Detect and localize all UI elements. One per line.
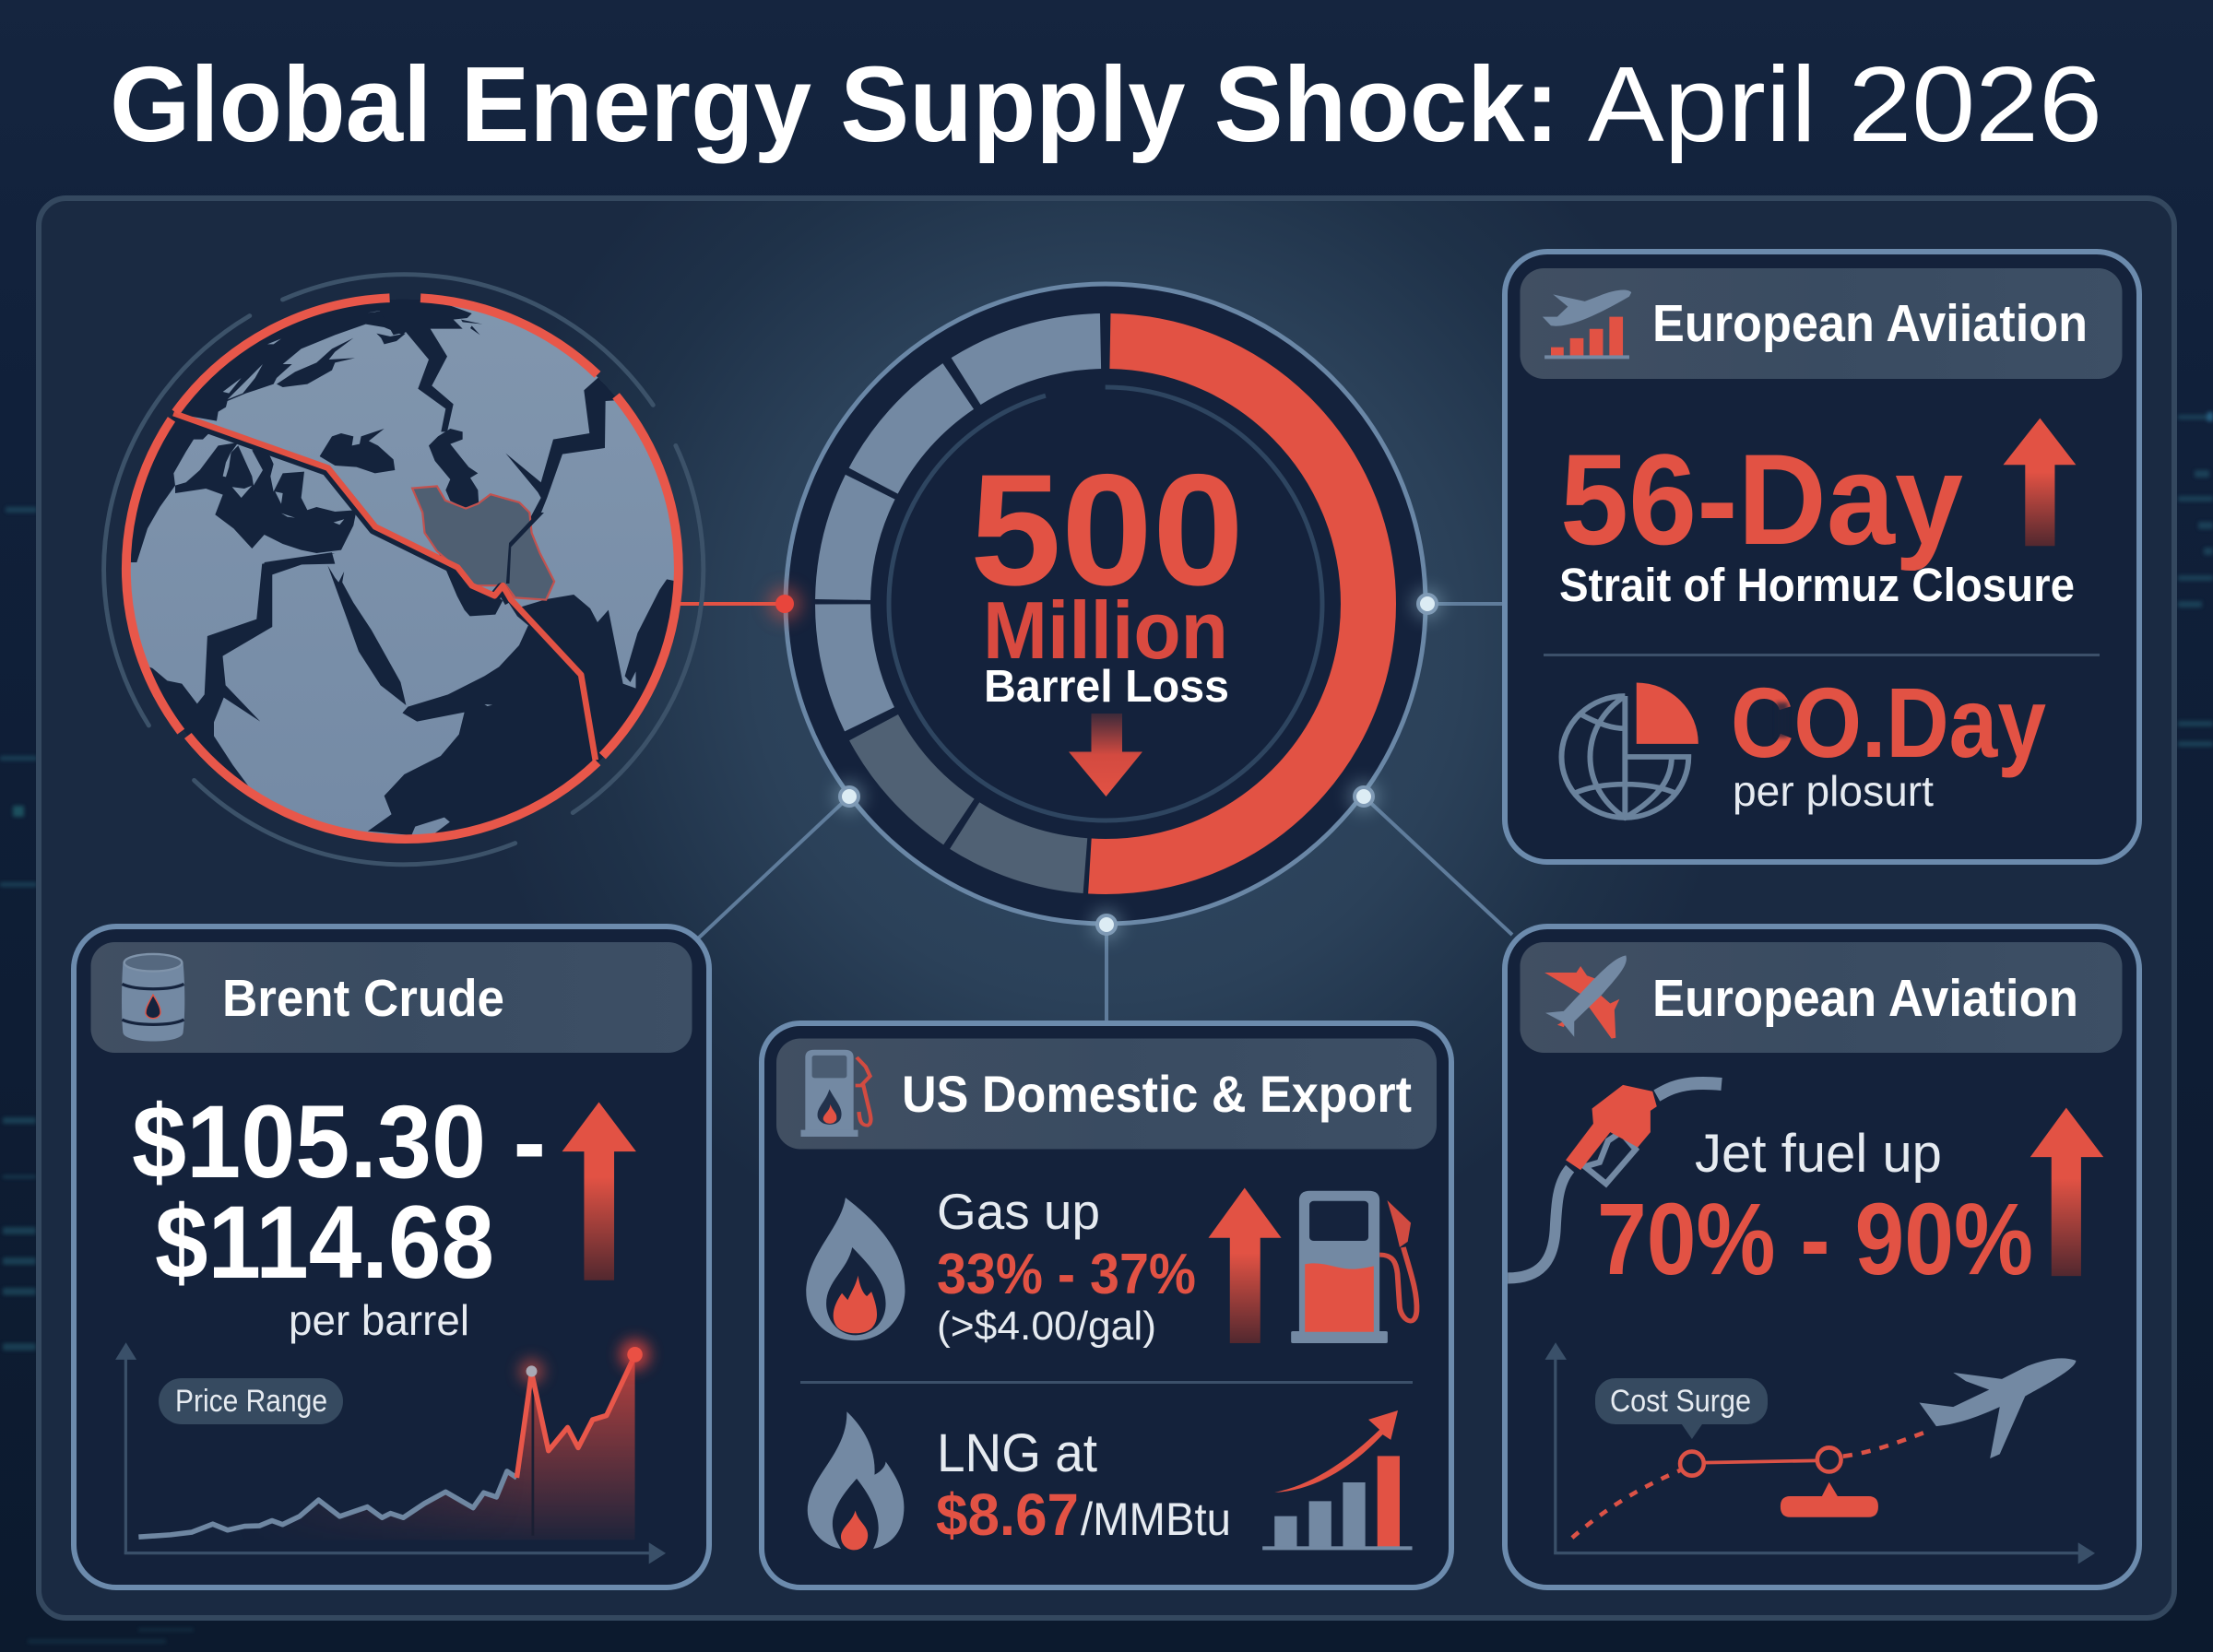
icon: plane and bars <box>1543 289 1631 359</box>
unit caption: per barrel <box>289 1296 469 1344</box>
connector lines <box>680 604 1512 1025</box>
icon: oil barrel <box>122 954 184 1042</box>
title: Global Energy Supply Shock: <box>110 44 1559 164</box>
header text: Brent Crude <box>222 969 504 1028</box>
price range: $114.68 <box>155 1185 494 1300</box>
pill: cost surge: Cost Surge <box>1610 1384 1751 1419</box>
glyph smudge <box>1776 702 1788 738</box>
pill pointer <box>1680 1422 1704 1439</box>
price range <box>132 1084 546 1300</box>
globe red ring <box>126 298 679 839</box>
gauge disc <box>786 284 1426 924</box>
icon: down arrow <box>1069 714 1142 796</box>
divider <box>1544 654 2100 656</box>
panel frame <box>1505 926 2139 1587</box>
panel frame <box>1505 252 2139 862</box>
panel header <box>1520 268 2123 379</box>
panel: strait of hormuz <box>1505 252 2139 862</box>
panel frame <box>762 1023 1451 1587</box>
icon: gas flame <box>806 1198 905 1340</box>
gauge caption: Barrel Loss <box>984 662 1229 712</box>
lng stat: /MMBtu <box>1081 1493 1231 1545</box>
icon: globe with pie <box>1561 682 1698 818</box>
central gauge <box>786 284 1426 924</box>
gas stat: 33% - 37% <box>937 1243 1196 1306</box>
jet fuel stat: 70% - 90% <box>1597 1183 2033 1296</box>
chart area <box>308 1363 635 1540</box>
red marker <box>1781 1482 1878 1517</box>
chart axes <box>115 1342 666 1564</box>
icon: bar chart <box>1262 1410 1413 1550</box>
panel frame <box>74 926 709 1587</box>
globe outer arcs <box>104 275 704 865</box>
icon: header plane <box>1544 955 1627 1039</box>
pill: price range <box>159 1378 343 1424</box>
icon: fuel pump <box>1291 1191 1416 1343</box>
jet fuel caption: Jet fuel up <box>1695 1124 1942 1184</box>
iran highlight <box>412 486 554 600</box>
globe land and seas <box>131 306 674 835</box>
pill: price range: Price Range <box>175 1384 327 1419</box>
lng stat: LNG at <box>937 1423 1097 1483</box>
lng stat: $8.67 <box>936 1481 1079 1548</box>
panel header <box>90 942 692 1053</box>
chart line <box>138 1355 635 1537</box>
stat caption: per plosurt <box>1733 767 1934 815</box>
connector nodes <box>768 587 1443 940</box>
gas stat: Gas up <box>937 1183 1100 1240</box>
icon: plane <box>1919 1358 2076 1458</box>
chart peaks <box>519 1339 650 1384</box>
graphics <box>1508 955 2103 1564</box>
header text: European Aviiation <box>1652 294 2088 353</box>
header text: European Aviation <box>1652 969 2078 1028</box>
globe map with fractured supply route <box>104 275 704 865</box>
gauge unit: Million <box>983 584 1228 676</box>
cost path <box>1572 1431 1930 1538</box>
panel header <box>776 1038 1437 1149</box>
panel: us domestic and export <box>762 1023 1451 1587</box>
icon: lng flame <box>808 1411 904 1550</box>
stat: co day: CO.Day <box>1731 667 2046 778</box>
icon: up arrow <box>2030 1108 2103 1276</box>
stat caption: Strait of Hormuz Closure <box>1559 559 2075 611</box>
header text: US Domestic & Export <box>902 1065 1412 1123</box>
icon: fuel nozzle <box>1508 1083 1722 1278</box>
chart and arrow <box>115 1103 666 1564</box>
pill: cost surge <box>1595 1378 1768 1424</box>
panel: european aviation <box>1505 926 2139 1587</box>
panel: brent crude <box>74 926 709 1587</box>
gas stat: (>$4.00/gal) <box>937 1304 1156 1349</box>
price range: $105.30 - <box>132 1084 546 1199</box>
chart axes <box>1545 1342 2095 1564</box>
gauge segments <box>843 341 1368 867</box>
gauge value: 500 <box>970 442 1244 619</box>
divider <box>800 1381 1413 1384</box>
lng stat <box>936 1423 1231 1548</box>
icon: header pump <box>800 1050 870 1137</box>
panel header <box>1520 942 2123 1053</box>
icon: up arrow <box>2003 419 2076 546</box>
gas stat <box>937 1183 1196 1349</box>
fractured route line <box>172 413 596 760</box>
icon: up arrow <box>1209 1187 1282 1343</box>
title: April 2026 <box>1588 44 2102 164</box>
stat: 56-day: 56-Day <box>1560 427 1963 572</box>
icons <box>800 1050 1416 1550</box>
icon: up arrow <box>562 1103 636 1280</box>
